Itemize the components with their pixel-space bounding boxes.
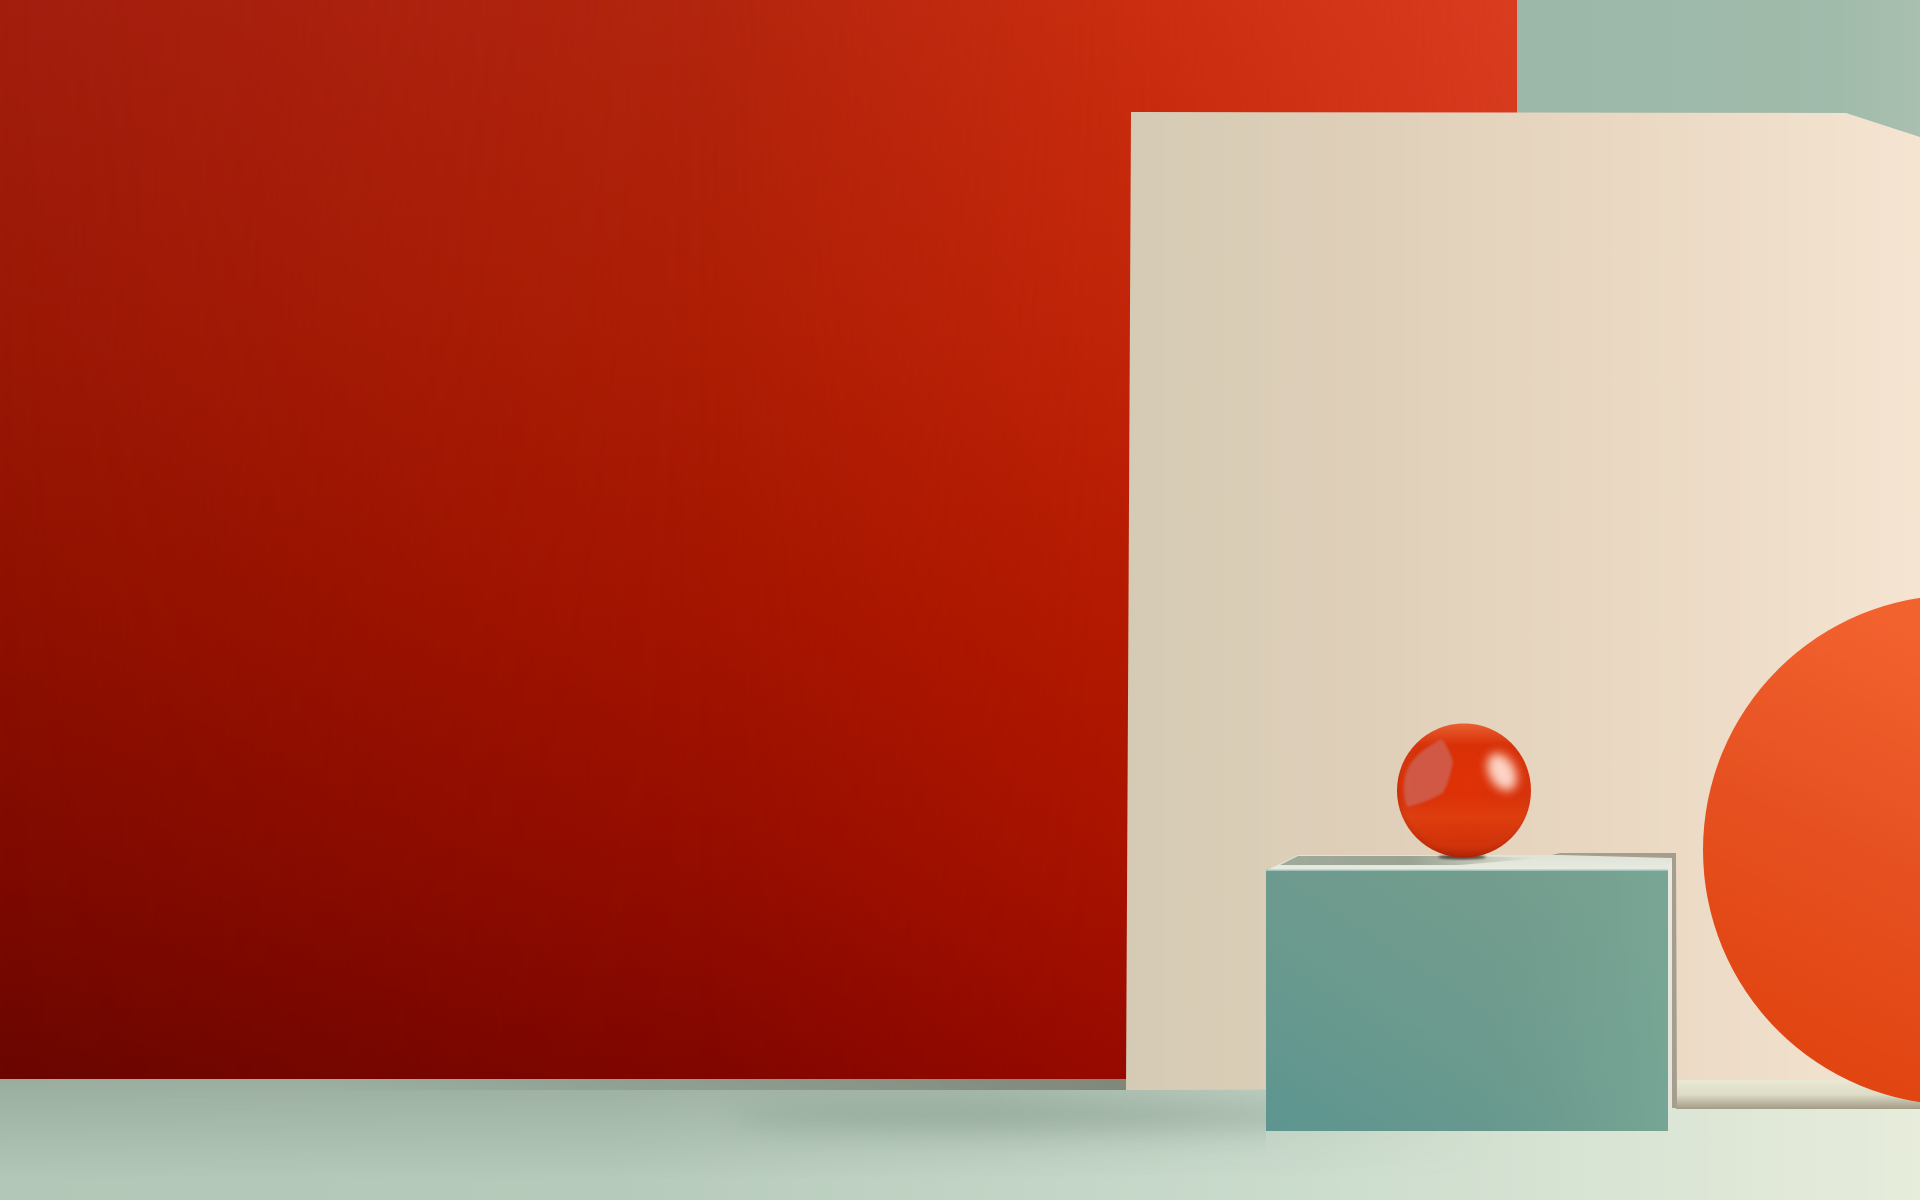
panel: floor	[0, 1079, 1920, 1200]
ball window reflection	[1404, 739, 1453, 807]
shadow on block top	[1280, 856, 1540, 865]
ball specular highlight	[1481, 748, 1523, 796]
panel: sage green wall at top right	[1517, 0, 1920, 160]
ball top rim light	[1420, 724, 1508, 742]
shape: teal block	[1265, 853, 1677, 1131]
panel: cream backdrop card	[1126, 112, 1920, 1090]
block top surface	[1265, 855, 1672, 871]
block back ledge and side shadow	[1540, 853, 1677, 1108]
shape: glossy red ball	[1395, 722, 1535, 860]
panel: red back wall	[0, 0, 1517, 1080]
block front face	[1266, 871, 1668, 1131]
block right edge strip	[1668, 858, 1672, 1112]
ball lower lit band	[1398, 805, 1530, 858]
shape: large orange disc	[1703, 595, 1920, 1105]
